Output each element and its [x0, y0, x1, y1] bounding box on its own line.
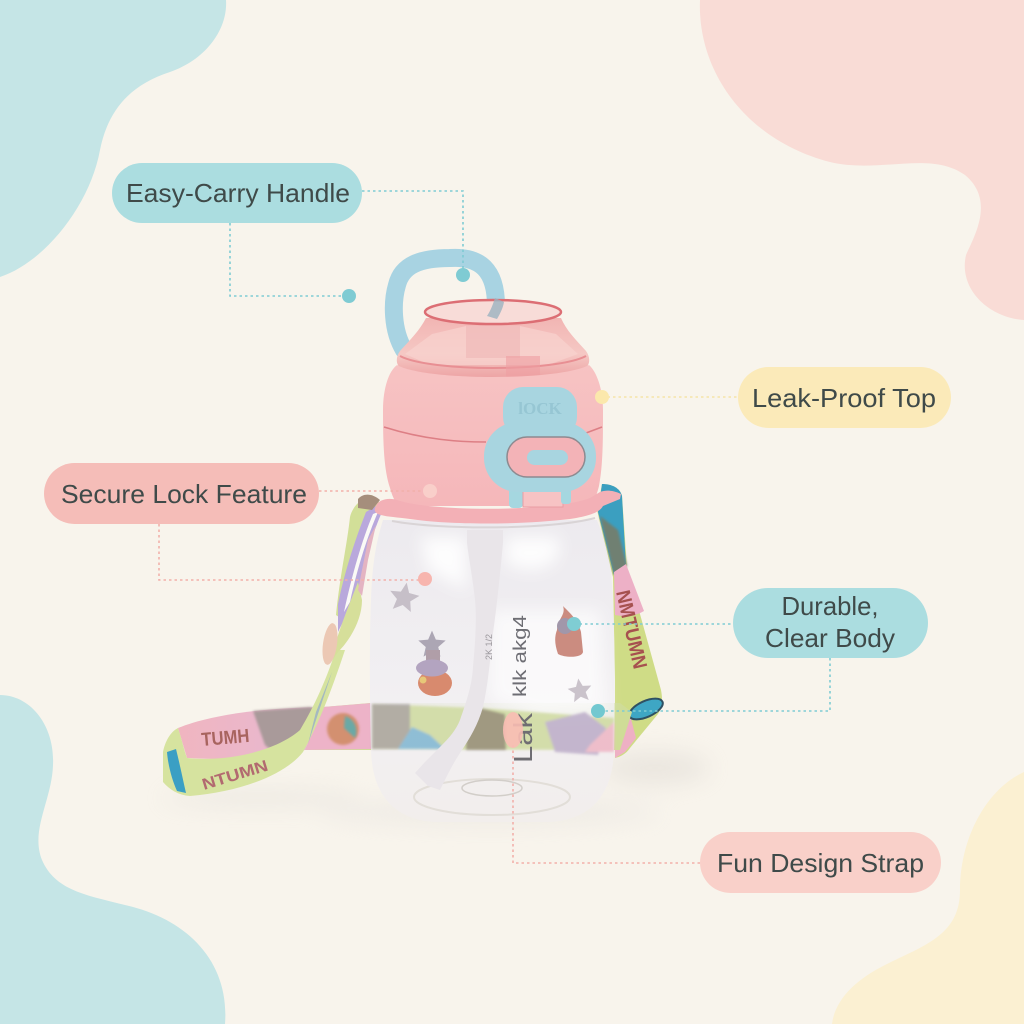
handle: [394, 258, 496, 350]
inner strap print: [372, 704, 614, 755]
strap: right side: [597, 484, 666, 758]
background blob: bottom-right yellow: [832, 772, 1024, 1024]
background blob: bottom-left teal: [0, 695, 225, 1024]
callout: durable clear body: [567, 588, 928, 718]
base ring: [414, 779, 570, 815]
callout: fun design strap: [503, 712, 941, 893]
straw: [415, 530, 503, 790]
lock button: [484, 387, 596, 508]
callout: leak-proof top: Leak-Proof Top: [752, 383, 936, 413]
star decoration 2: [418, 631, 446, 657]
callout: leak-proof top: [595, 367, 951, 428]
strap: left loop: [163, 650, 345, 796]
background blob: top-left teal: [0, 0, 226, 277]
callout: durable clear body: Clear Body: [765, 623, 895, 653]
strap text NTUMN: NTUMN: [200, 758, 270, 794]
pumpkin decoration: [416, 650, 452, 696]
base centre: [462, 780, 522, 796]
strap: upper left: [320, 495, 382, 666]
callout: durable clear body: Durable,: [782, 591, 878, 621]
floor shadow: [160, 752, 710, 826]
bottle ring: [375, 491, 621, 527]
callout: easy-carry handle: Easy-Carry Handle: [126, 178, 350, 208]
background blob: top-right pink: [700, 0, 1024, 320]
strap: back band behind bottle: [305, 703, 632, 750]
star decoration 1: [387, 580, 421, 613]
strap text right: NMTUMN: [611, 588, 651, 671]
printed word: Lak: [508, 712, 538, 763]
strap text TUMH: TUMH: [201, 726, 250, 751]
printed markings: klk akg4: [510, 615, 530, 697]
lid: [397, 298, 589, 378]
star decoration 3: [566, 677, 593, 703]
straw markings: 2K 1/2: [484, 634, 494, 660]
bottle body: [370, 520, 615, 822]
strawberry decoration: [555, 606, 583, 657]
callout: secure lock feature: [44, 463, 437, 586]
lock text: lOCK: [518, 399, 562, 418]
callout: easy-carry handle: [112, 163, 470, 303]
callout: secure lock feature: Secure Lock Feature: [61, 479, 307, 509]
bottle highlights: [420, 537, 606, 716]
callout: fun design strap: Fun Design Strap: [717, 848, 924, 878]
collar: [383, 365, 603, 506]
